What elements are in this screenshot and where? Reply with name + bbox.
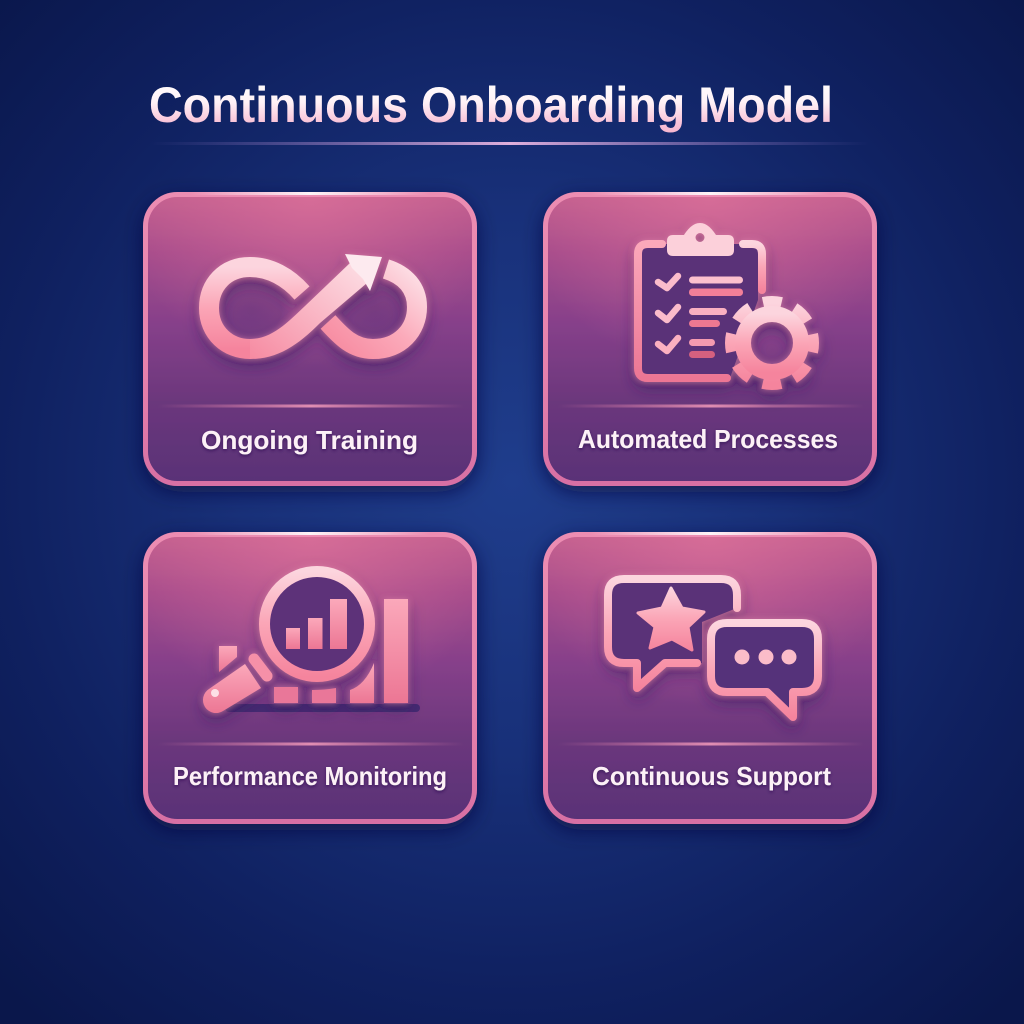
label: automated processes: Automated Processes [578,424,838,454]
panel: continuous support [546,532,874,822]
label: continuous support: Continuous Support [592,761,831,791]
panel: ongoing training [146,192,474,484]
label: performance monitoring: Performance Monitoring [173,761,447,791]
label: ongoing training: Ongoing Training [201,425,418,455]
icon: chat bubbles with star and dots [608,579,818,717]
panel: automated processes [546,192,874,484]
title: Continuous Onboarding Model [149,77,833,133]
panel: performance monitoring [146,532,474,822]
icon: clipboard checklist with gear [638,223,812,383]
icon: magnifier over bar chart [203,572,420,713]
icon: infinity loop with arrow [209,254,417,359]
